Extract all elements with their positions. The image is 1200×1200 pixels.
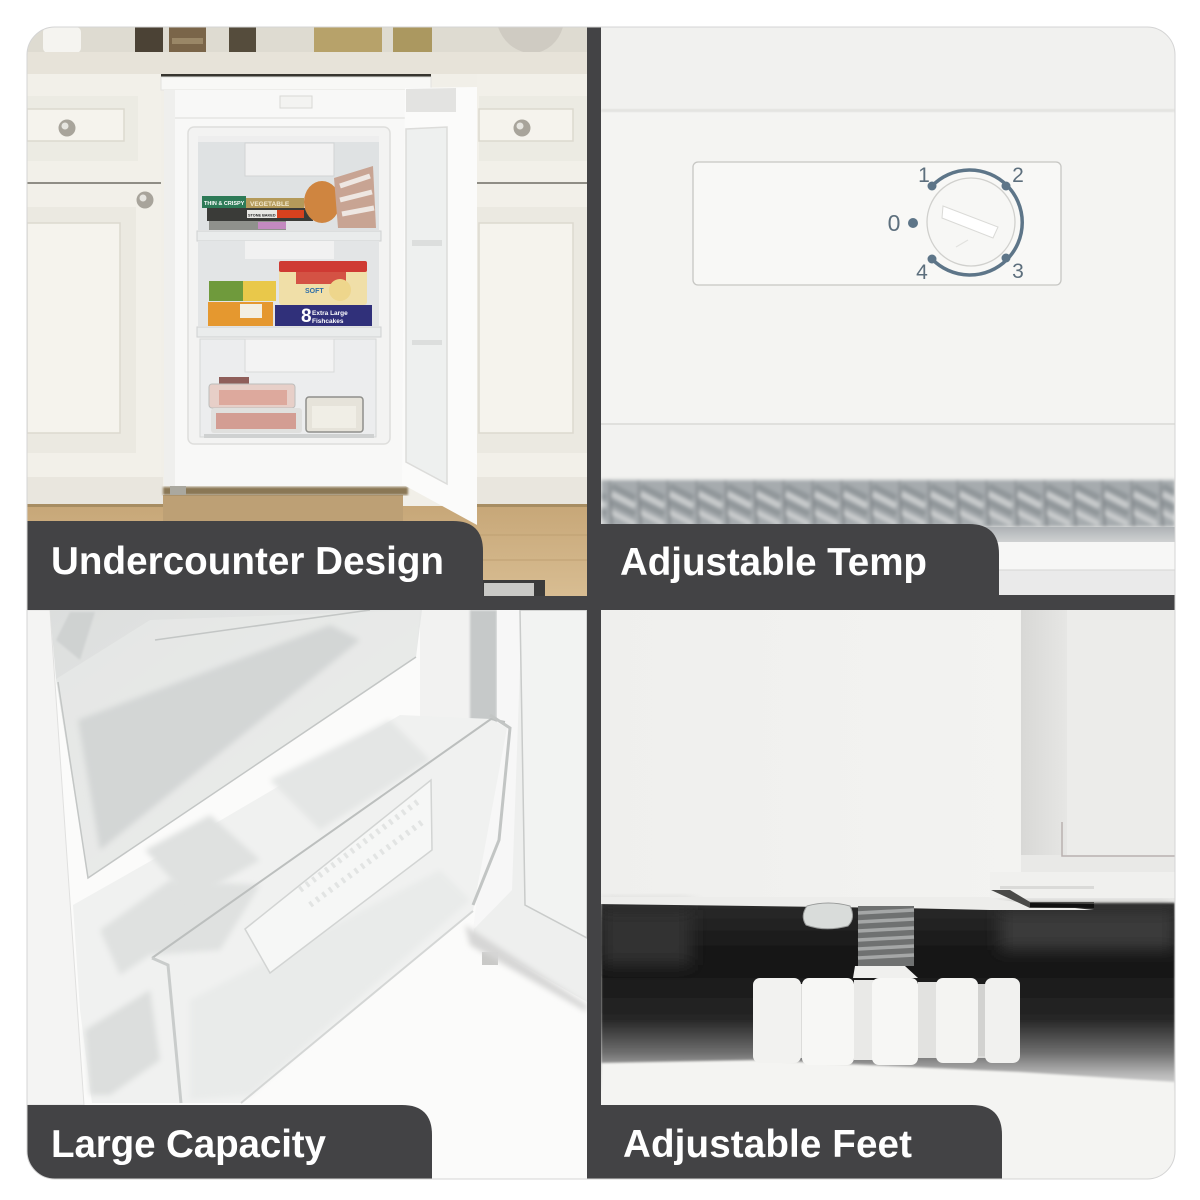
right cabinets (477, 74, 587, 506)
middle drawer food: Extra Large (312, 310, 348, 317)
bottom drawer food (209, 377, 363, 433)
divider bars (587, 27, 601, 1179)
levelling foot (753, 966, 1020, 1065)
temperature dial: 4 (916, 261, 928, 284)
temperature dial: 0 (888, 210, 900, 236)
countertop (27, 52, 587, 74)
label: adjustable temp (601, 524, 999, 596)
left cabinets (27, 74, 163, 506)
panel: adjustable feet photo (601, 610, 1175, 1179)
top drawer food: VEGETABLE (250, 201, 290, 208)
top drawer food: STONE BAKED (248, 214, 276, 218)
floor shadow (465, 925, 587, 1012)
label: adjustable feet: Adjustable Feet (623, 1123, 912, 1166)
upper drawer (50, 610, 422, 878)
panel: large capacity photo (27, 610, 587, 1179)
freezer body (161, 74, 431, 495)
freezer bottom (601, 897, 1094, 910)
door and back wall (420, 610, 587, 1002)
top drawer food (202, 166, 376, 230)
middle drawer food (208, 261, 372, 327)
label: large capacity (27, 1105, 432, 1179)
freezer door (402, 87, 477, 525)
middle drawer food: Fishcakes (312, 318, 344, 325)
floor mat (483, 580, 545, 596)
threaded bolt (858, 906, 914, 966)
label: undercounter design (27, 521, 483, 596)
label: large capacity: Large Capacity (51, 1123, 327, 1166)
label: adjustable feet (601, 1105, 1002, 1179)
top drawer food: THIN & CRISPY (204, 201, 245, 207)
drawers and food (197, 136, 381, 438)
floor (27, 506, 587, 596)
drawer handle (245, 780, 432, 973)
label: undercounter design: Undercounter Design (51, 540, 444, 583)
cabinet side (27, 610, 84, 1105)
wall and shelf items (27, 27, 587, 54)
mesh shelf (601, 480, 1175, 527)
control panel (693, 162, 1061, 285)
temperature dial: 1 (918, 164, 930, 187)
small rear foot (803, 903, 853, 929)
panel: undercounter design photo (27, 27, 587, 596)
dark gap under freezer (601, 903, 1175, 1090)
lower drawer (73, 715, 510, 1103)
temperature dial (888, 164, 1024, 284)
panel: adjustable temp photo (601, 27, 1175, 596)
temperature dial: 2 (1012, 164, 1024, 187)
middle drawer food: SOFT (305, 288, 324, 295)
label: adjustable temp: Adjustable Temp (620, 541, 927, 584)
temperature dial: 3 (1012, 260, 1024, 283)
middle drawer food: 8 (301, 306, 312, 327)
